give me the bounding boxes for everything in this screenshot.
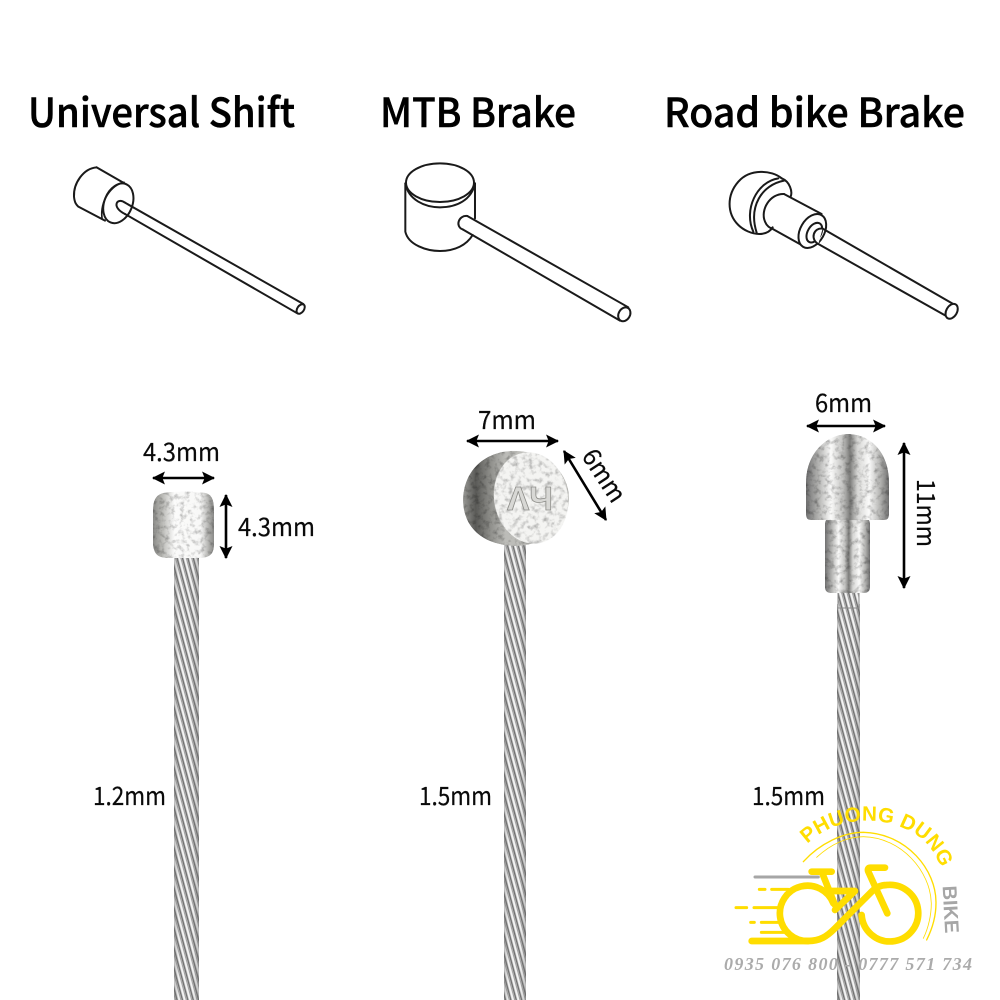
- dimension: road wire diameter: 1.5mm: [752, 777, 825, 813]
- heading: Road bike Brake: Road bike Brake: [664, 81, 965, 139]
- dimension: road head width: [807, 384, 885, 426]
- heading: MTB Brake: MTB Brake: [380, 81, 576, 139]
- logo: Phuong Dung Bike watermark: [734, 806, 962, 945]
- cable: MTB brake wire: [504, 544, 526, 1000]
- cable: universal shift wire: [174, 552, 199, 1000]
- bicycle mark: [752, 868, 918, 941]
- icon: universal shift cable head line drawing: [74, 167, 306, 315]
- dimension: MTB head width: 7mm: [478, 401, 536, 437]
- speed lines: [736, 877, 818, 932]
- logo wordmark: PHUONG DUNG: [799, 806, 952, 866]
- dimension: universal head width: 4.3mm: [143, 433, 220, 469]
- embossed marking on head: ΛЧ: [507, 480, 553, 517]
- cable: road bike brake wire: [837, 604, 860, 1000]
- photo: MTB brake barrel head: [463, 446, 575, 550]
- dimension: universal head height: [226, 495, 315, 558]
- photo: universal shift barrel head: [153, 492, 214, 558]
- dimension: universal wire diameter: 1.2mm: [93, 777, 166, 813]
- dimension: MTB wire diameter: 1.5mm: [419, 777, 492, 813]
- watermark phone numbers: 0935 076 800 - 0777 571 734: [724, 954, 972, 974]
- logo word: BIKE: BIKE: [938, 885, 962, 934]
- logo arcs: [803, 832, 936, 940]
- dimension: road head length: 11mm: [909, 479, 945, 547]
- icon: MTB brake cable head line drawing: [405, 163, 633, 324]
- heading: Universal Shift: Universal Shift: [28, 81, 295, 139]
- dimension: universal head height: 4.3mm: [238, 508, 315, 544]
- dimension: MTB head thickness: 6mm: [574, 441, 636, 509]
- dimension: MTB head width: [467, 401, 558, 441]
- dimension: road head width: 6mm: [815, 384, 872, 420]
- icon: road bike brake cable head line drawing: [730, 172, 960, 321]
- photo: road bike brake head: [806, 434, 889, 608]
